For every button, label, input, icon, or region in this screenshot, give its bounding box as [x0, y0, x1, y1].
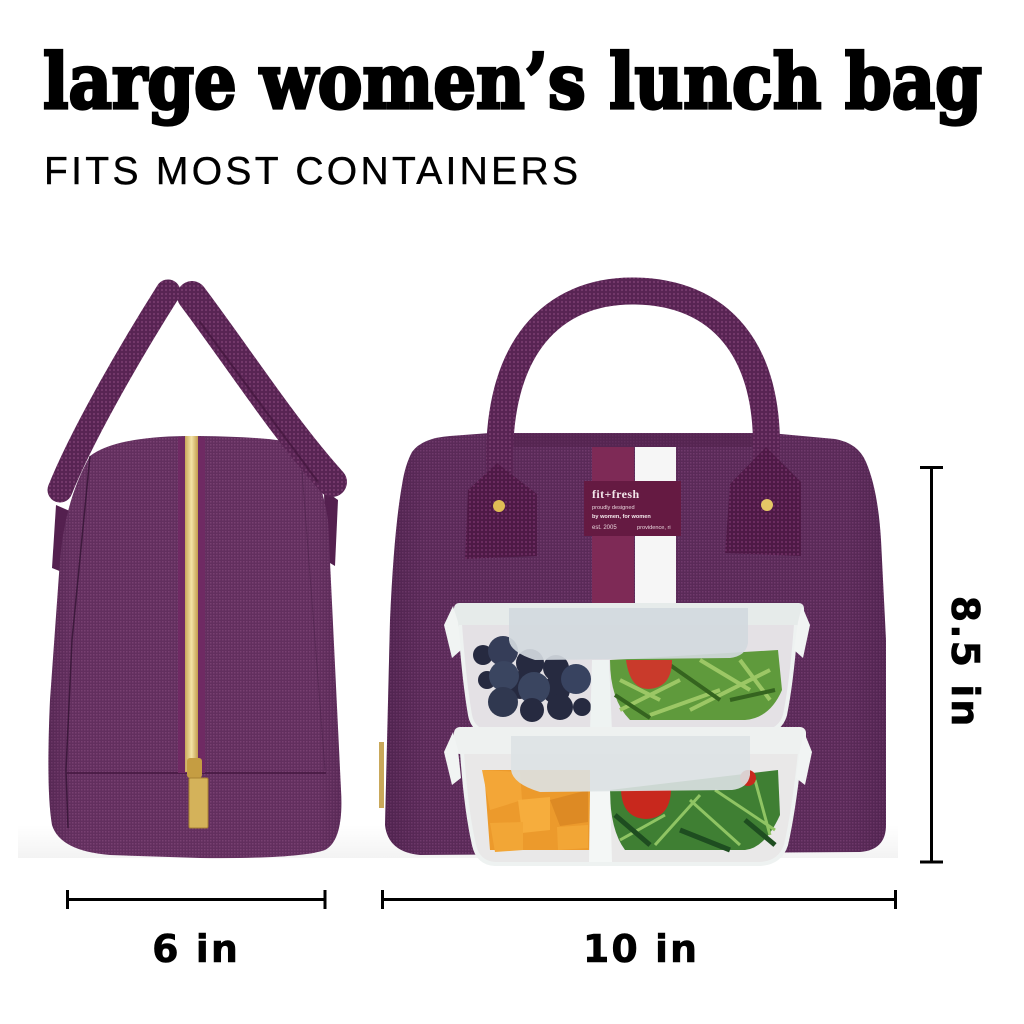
lid flap — [509, 608, 748, 660]
blueberries — [473, 636, 591, 722]
right strap tab — [725, 447, 801, 556]
front bag body — [385, 433, 886, 855]
salad bottom — [610, 770, 780, 850]
side bag handles — [60, 292, 332, 490]
zipper pull — [187, 758, 208, 828]
bottom seam — [67, 772, 326, 774]
dimension label: 10 in: 10 in — [583, 927, 699, 971]
brand label: est. 2005 — [592, 525, 617, 531]
front view bag — [379, 291, 886, 855]
top flap strip — [505, 434, 765, 447]
side bag body — [48, 436, 341, 858]
brand label: fit+fresh — [592, 487, 640, 501]
front bag handle — [500, 291, 766, 475]
glass interior — [460, 624, 796, 733]
side bag strap tabs — [52, 490, 338, 574]
dimension label: 6 in: 6 in — [152, 927, 240, 971]
glass interior — [462, 752, 800, 864]
subtitle: FITS MOST CONTAINERS — [44, 150, 578, 193]
left clip — [444, 732, 461, 785]
right rivet — [761, 499, 773, 511]
left rivet — [493, 500, 505, 512]
dimension: 6 in width bar — [68, 890, 325, 909]
salad top — [610, 650, 782, 720]
zipper tape — [178, 437, 205, 773]
left strap tab — [465, 463, 537, 559]
glass outline — [462, 752, 800, 864]
right clip — [796, 732, 812, 785]
floor shadow — [18, 825, 898, 858]
lid — [454, 727, 806, 754]
top glass container — [444, 603, 810, 733]
orange cubes — [482, 770, 590, 852]
dimension label: 8.5 in: 8.5 in — [943, 596, 987, 728]
maroon stripe — [592, 447, 634, 607]
compartment divider — [589, 790, 612, 862]
dimension: 8.5 in height bar — [920, 468, 943, 862]
white stripe — [635, 447, 676, 607]
right clip — [794, 606, 810, 658]
left clip — [444, 606, 461, 658]
bottom glass container — [444, 727, 812, 864]
zipper teeth — [185, 436, 198, 772]
compartment divider — [590, 660, 612, 732]
brand label: by women, for women — [592, 514, 651, 520]
brand label: proudly designed — [592, 505, 635, 511]
brand label — [584, 481, 681, 536]
glass outline — [460, 624, 796, 733]
brand label: providence, ri — [637, 525, 671, 531]
side view bag — [48, 292, 341, 858]
dimension: 10 in width bar — [382, 890, 896, 909]
side zipper pull — [379, 742, 384, 808]
lid — [454, 603, 804, 625]
lid flap — [511, 736, 750, 792]
